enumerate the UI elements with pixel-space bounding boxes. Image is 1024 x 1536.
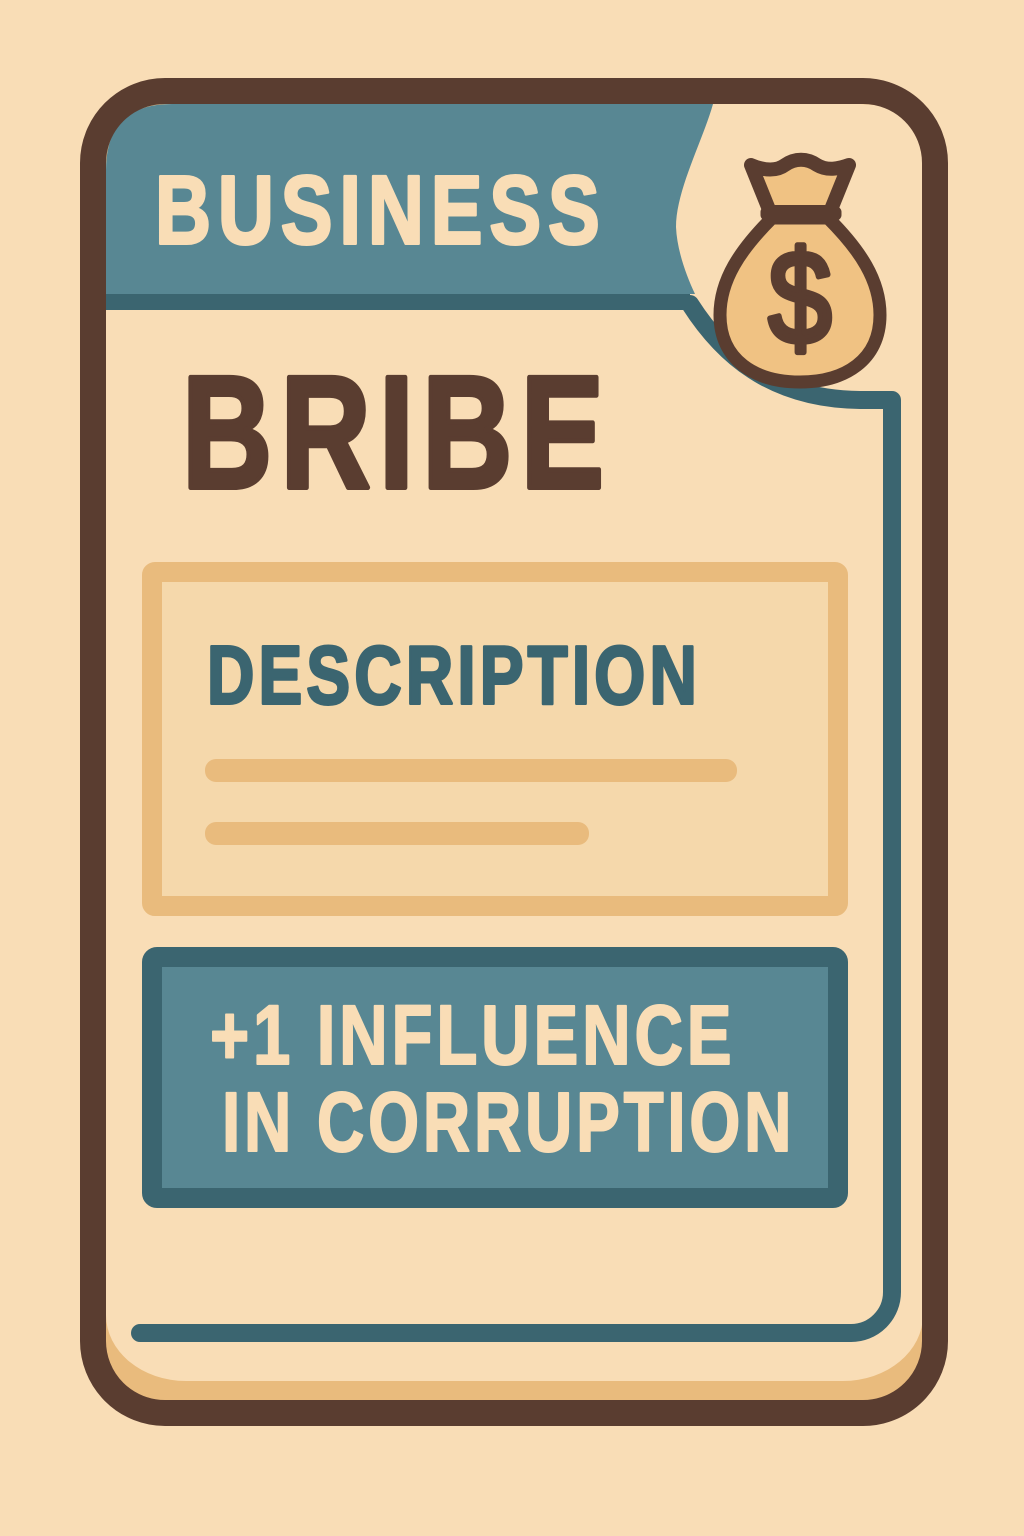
placeholder line one [205, 759, 737, 782]
card face [106, 104, 923, 1381]
bag neck [766, 212, 836, 215]
bag top [751, 160, 849, 212]
header banner [106, 104, 713, 310]
card title: BRIBE [182, 344, 604, 522]
effect text line two: IN CORRUPTION [222, 1075, 791, 1169]
header fill [106, 104, 713, 294]
header title: BUSINESS [155, 155, 600, 264]
card base edge [93, 91, 935, 1413]
icon: money bag [720, 160, 880, 382]
teal inner border line [140, 304, 892, 1333]
placeholder line two [205, 822, 589, 845]
dollar sign: $ [768, 224, 832, 371]
description heading: DESCRIPTION [207, 628, 697, 721]
effect box [152, 957, 838, 1198]
panel: effect [152, 957, 838, 1198]
panel: description [152, 572, 838, 906]
description box [152, 572, 838, 906]
header band shadow [106, 290, 690, 310]
effect text line one: +1 INFLUENCE [210, 989, 732, 1083]
card outer frame [93, 91, 935, 1413]
bag body [720, 218, 880, 382]
